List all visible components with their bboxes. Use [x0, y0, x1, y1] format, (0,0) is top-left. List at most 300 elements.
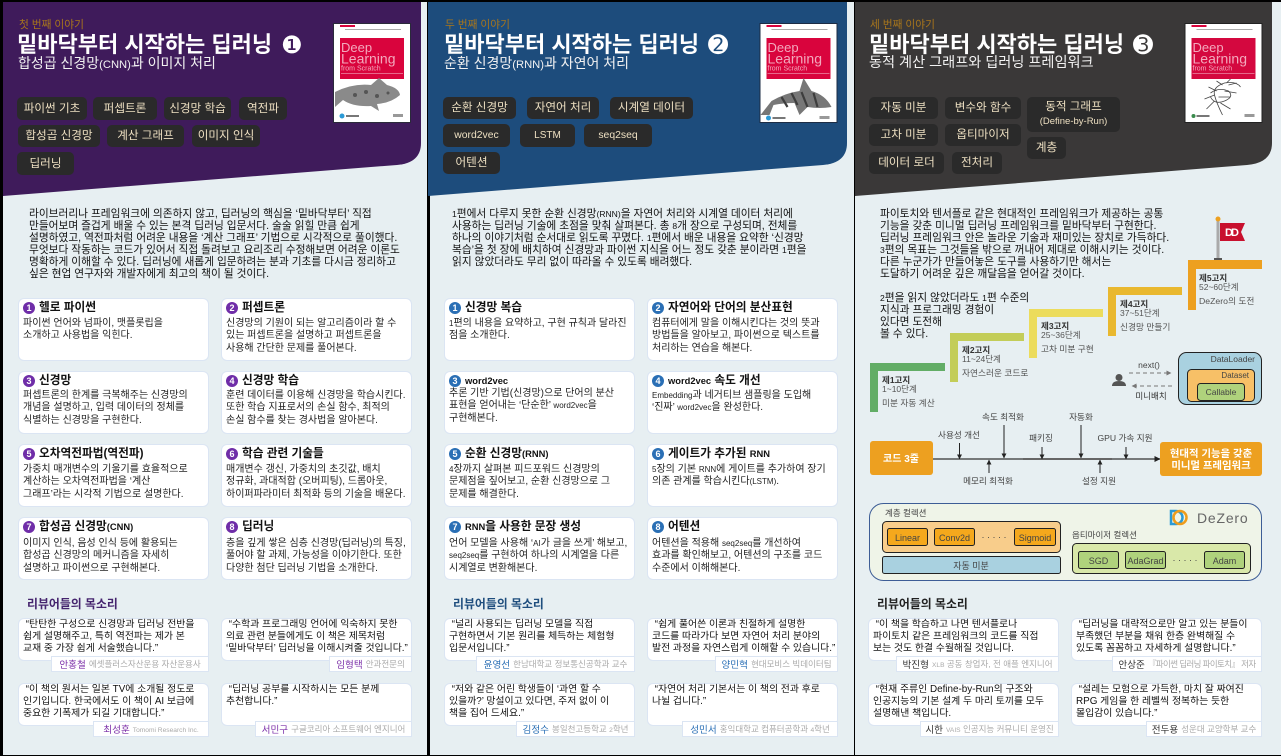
card text: 문제점을 짚어보고, 순환 신경망으로 그: [449, 476, 610, 487]
stair: base camp 5: [1188, 260, 1262, 310]
review text: [449, 684, 609, 721]
optimizer collection: SGD: [1089, 556, 1109, 566]
stair: base camp 1: [870, 363, 945, 412]
card text: 추론 기반 기법(신경망)으로 단어의 분산: [449, 388, 614, 399]
tag: 순환 신경망: [451, 101, 508, 114]
card text: 식별하는 신경망을 구현한다.: [23, 415, 142, 426]
review: [444, 618, 635, 672]
tag: [93, 97, 157, 120]
card text: 언어 모델을 사용해 ‘AI가 글을 쓰게’ 해보고,: [449, 538, 627, 549]
title: 밑바닥부터 시작하는 딥러닝: [869, 32, 1124, 57]
icon: number: 3: [452, 376, 458, 386]
layer collection: Sigmoid: [1019, 533, 1051, 543]
tag: [443, 97, 516, 119]
stair: base camp 2: 11~24단계: [962, 354, 1001, 364]
review text: 교재 중 가장 쉽게 서술했습니다.”: [23, 643, 158, 654]
title: 밑바닥부터 시작하는 딥러닝: [17, 32, 272, 57]
reviewer: [93, 721, 209, 737]
tag: [443, 124, 510, 147]
card text: 합성곱 신경망의 메커니즘을 자세히: [23, 550, 169, 561]
intro text: 만들어보며 즐겁게 배울 수 있는 본격 딥러닝 입문서다. 술술 읽힐 만큼 쉽게: [29, 220, 360, 232]
tag: 어텐션: [456, 156, 488, 169]
volume number: ➌: [1133, 31, 1153, 59]
prerequisite text: 볼 수 있다.: [880, 328, 928, 340]
reviews heading: 리뷰어들의 목소리: [877, 597, 968, 611]
review text: 몰입감이 있습니다.”: [1076, 708, 1157, 719]
icon: number: 6: [229, 449, 234, 459]
tag: 계층: [1036, 141, 1057, 154]
reviewer: [896, 656, 1059, 672]
book cover: Deep: [341, 40, 372, 55]
intro text: 1편에서 다루지 못한 순환 신경망(RNN)을 자연어 처리와 시계열 데이터 처리에: [452, 208, 793, 220]
reviewer: [476, 656, 635, 672]
card text: 처리하는 연습을 해본다.: [652, 343, 752, 354]
tag: 합성곱 신경망: [25, 129, 93, 142]
tag: [869, 97, 938, 119]
card: chapter 7: [18, 517, 209, 580]
card text: [449, 463, 610, 500]
reviewer: 한남대학교 정보통신공학과 교수: [513, 659, 627, 669]
review text: [1076, 619, 1247, 656]
review text: [226, 684, 379, 707]
tag: 자동 미분: [881, 101, 926, 114]
reviewer: 박진형: [902, 660, 929, 671]
tag: [239, 97, 287, 120]
card text: 컴퓨터에게 말을 이해시킨다는 것의 뜻과: [652, 318, 820, 329]
review: [18, 618, 209, 672]
arrow: next(): [1129, 360, 1171, 373]
card text: 계산하는 오차역전파법을 ‘계산: [23, 476, 150, 487]
card text: [226, 463, 406, 500]
review text: 추천합니다.”: [226, 696, 277, 707]
icon: number: 2: [229, 303, 234, 313]
tag: 시계열 데이터: [618, 101, 685, 114]
review text: 코드를 따라가다 보면 자연어 처리 분야의: [652, 631, 820, 642]
icon: user: [1112, 374, 1126, 386]
stair: base camp 3: [1029, 309, 1103, 358]
card text: [449, 387, 614, 424]
review text: 쉽게 설명해주고, 특히 역전파는 제가 본: [23, 631, 185, 642]
review: [647, 618, 838, 672]
tag: [17, 152, 74, 175]
card text: 소개하고 사용법을 익힌다.: [23, 330, 133, 341]
stair: base camp 3: 고차 미분 구현: [1041, 343, 1094, 354]
layer collection: · · · · ·: [982, 532, 1006, 542]
timeline feature labels and arrows: 속도 최적화: [982, 411, 1024, 422]
intro text: 딥러닝 프레임워크 안은 놀라운 기술과 재미있는 장치로 가득하다.: [880, 232, 1169, 244]
optimizer collection: [1072, 530, 1250, 574]
review text: “이 책의 원서는 일본 TV에 소개될 정도로: [26, 684, 194, 695]
icon: number: [23, 302, 35, 314]
timeline feature labels and arrows: 사용성 개선: [938, 430, 980, 440]
reviewer: [255, 721, 412, 737]
layer collection: Conv2d: [939, 533, 970, 543]
reviewer: 윤영선: [484, 660, 510, 671]
tag: [610, 97, 693, 119]
reviewer: 성민서: [690, 725, 717, 736]
review text: “설레는 모험으로 가득한, 마치 잘 짜여진: [1079, 684, 1244, 695]
icon: number: 6: [655, 449, 660, 459]
stair: base camp 2: [950, 333, 1028, 382]
reviewer: [51, 656, 209, 672]
review text: [652, 619, 835, 656]
stair: base camp 4: 제4고지: [1120, 299, 1148, 309]
panel: book 3: [854, 0, 1281, 756]
diagrams: stairs, dataloader, timeline, DeZero: [854, 200, 1281, 590]
review: [221, 683, 412, 737]
stair: base camp 2: 자연스러운 코드로: [962, 368, 1028, 378]
tag: [520, 124, 575, 147]
subtitle: 합성곱 신경망(CNN)과 이미지 처리: [18, 55, 216, 71]
card title: 순환 신경망(RNN): [465, 447, 548, 460]
tag: 딥러닝: [30, 156, 62, 170]
arrow: next(): next(): [1138, 360, 1160, 370]
card text: 1편의 내용을 요약하고, 구현 규칙과 달라진: [449, 318, 627, 329]
tag: 이미지 인식: [198, 129, 254, 142]
card text: 어텐션을 적용해 seq2seq를 개선하여: [652, 538, 801, 549]
icon: summit flag: [1214, 216, 1245, 260]
tag: [869, 152, 944, 174]
card: chapter 5: [444, 444, 635, 507]
reviewer: [329, 656, 412, 672]
timeline start: code 3 lines: 코드 3줄: [883, 453, 919, 465]
intro text: 다른 누군가가 만들어놓은 도구를 사용하기만 해서는: [880, 256, 1111, 268]
card text: [652, 317, 820, 354]
icon: number: 3: [26, 376, 32, 386]
title: 밑바닥부터 시작하는 딥러닝: [444, 32, 699, 57]
review text: “널리 사용되는 딥러닝 모델을 직접: [452, 619, 593, 630]
card text: seq2seq를 구현하여 하나의 시계열을 다른: [449, 550, 619, 561]
card: chapter 6: [221, 444, 412, 507]
intro text: [29, 208, 400, 280]
card text: ‘진짜’ word2vec을 완성한다.: [652, 402, 763, 413]
icon: number: 5: [452, 449, 458, 459]
tag: [952, 152, 1002, 174]
review: [221, 618, 412, 672]
tag: [527, 97, 599, 119]
reviewer: 최성훈: [103, 725, 130, 736]
review text: 인기입니다. 한국에서도 이 책이 AI 보급에: [23, 696, 194, 707]
reviewer: [516, 721, 635, 737]
timeline feature labels and arrows: 설정 지원: [1082, 476, 1116, 486]
intro text: 도달하기 어려운 깊은 깨달음을 얻어갈 것이다.: [880, 268, 1085, 280]
timeline end: minimal framework: 현대적 기능을 갖춘: [1170, 447, 1253, 460]
review: [1071, 618, 1262, 672]
review text: “쉽게 풀어쓴 이론과 친절하게 설명한: [655, 619, 805, 630]
card text: 손실 함수를 찾는 경사법을 알아본다.: [226, 415, 378, 426]
DeZero logo: DeZero: [1197, 510, 1248, 526]
card text: [652, 389, 811, 413]
review text: [873, 684, 1044, 721]
icon: number: 2: [655, 303, 660, 313]
book cover: [760, 23, 838, 123]
card text: Embedding과 네거티브 샘플링을 도입해: [652, 390, 811, 401]
review text: 있을까?’ 망설이고 있다면, 주저 없이 이: [449, 696, 609, 707]
prerequisite text: 지식과 프로그래밍 경험이: [880, 304, 994, 316]
stair: base camp 1: 미분 자동 계산: [882, 397, 935, 408]
tag: [869, 124, 938, 146]
panel background: [855, 2, 1281, 755]
reviewer: [1146, 721, 1262, 737]
tag: seq2seq: [598, 130, 638, 140]
card text: 설명하고 파이썬으로 구현해본다.: [23, 563, 160, 574]
book cover: from Scratch: [341, 66, 381, 72]
card title: 헬로 파이썬: [39, 301, 96, 314]
review text: 책을 집어 드세요.”: [449, 708, 524, 719]
stair: base camp 5: DeZero의 도전: [1199, 296, 1254, 306]
card text: [449, 317, 627, 341]
card text: 가중치 매개변수의 기울기를 효율적으로: [23, 464, 188, 475]
review text: ‘밑바닥부터’ 딥러닝을 이해시켜줄 것입니다.”: [226, 643, 408, 654]
icon: number: 1: [26, 303, 32, 313]
card text: 점을 소개한다.: [449, 330, 510, 341]
intro text: 무엇보다 작동하는 코드가 있어서 직접 돌려보고 요리조리 수정해보면 어려운 이론도: [29, 244, 400, 256]
review text: 파이토치 같은 프레임워크의 코드를 직접: [873, 631, 1038, 642]
reviewer: 안상준: [1118, 660, 1145, 671]
card title: 딥러닝: [242, 520, 274, 533]
stair: base camp 5: 제5고지: [1199, 273, 1227, 283]
book cover: Deep: [768, 40, 799, 55]
icon: number: 4: [655, 376, 660, 386]
card text: 매개변수 갱신, 가중치의 초깃값, 배치: [226, 464, 381, 475]
subtitle: 동적 계산 그래프와 딥러닝 프레임워크: [869, 55, 1094, 71]
card: chapter 2: [647, 298, 838, 361]
intro text: [452, 208, 806, 268]
reviewer: 시한: [925, 725, 943, 736]
card text: 퍼셉트론의 한계를 극복해주는 신경망의: [23, 390, 188, 401]
prerequisite text: 2편을 읽지 않았더라도 1편 수준의: [880, 292, 1029, 304]
reviewer: [682, 721, 838, 737]
intro text: 파이토치와 텐서플로 같은 현대적인 프레임워크가 제공하는 공통: [880, 208, 1163, 220]
card text: [449, 537, 627, 574]
tag: [18, 125, 100, 147]
tag: 자연어 처리: [535, 101, 591, 114]
card text: 이미지 인식, 음성 인식 등에 활용되는: [23, 538, 178, 549]
autograd box: 자동 미분: [953, 561, 989, 571]
stair: base camp 3: 25~36단계: [1041, 330, 1081, 340]
icon: summit flag: DD: [1225, 227, 1239, 239]
tag: [443, 152, 500, 174]
volume number: ➋: [708, 31, 728, 59]
card text: 훈련 데이터를 이용해 신경망을 학습시킨다.: [226, 390, 406, 401]
stair: base camp 1: 제1고지: [882, 375, 910, 385]
reviewer: 에셋플러스자산운용 자산운용사: [89, 659, 201, 669]
icon: number: 7: [452, 522, 458, 532]
icon: number: [449, 521, 461, 533]
card: chapter 3: [444, 371, 635, 434]
intro text: 복습’을 첫 장에 배치하여 신경망과 파이썬 지식을 어느 정도 갖춘 분이라면 1편을: [452, 244, 806, 256]
reviewer: 성운대 교양학부 교수: [1181, 724, 1256, 734]
card text: [23, 317, 163, 341]
card text: 개념을 설명하고, 입력 데이터의 정체를: [23, 402, 184, 413]
stair: base camp 4: 신경망 만들기: [1120, 321, 1170, 332]
card text: [23, 537, 178, 574]
review text: 중요한 기폭제가 되길 기대합니다.”: [23, 708, 164, 719]
reviewer: 현대모비스 빅데이터팀: [751, 659, 832, 669]
card text: 다양한 첨단 딥러닝 기법을 소개한다.: [226, 563, 378, 574]
card title: 자연어와 단어의 분산표현: [668, 301, 793, 314]
tag: 전처리: [961, 156, 993, 169]
tag: [1027, 97, 1120, 132]
review text: “현재 주류인 Define-by-Run의 구조와: [876, 684, 1033, 695]
DeZero architecture panel: [870, 504, 1262, 580]
icon: number: [652, 448, 664, 460]
icon: number: [449, 302, 461, 314]
tag: 퍼셉트론: [104, 102, 146, 114]
review text: 구현하면서 기본 원리를 체득하는 체험형: [449, 631, 614, 642]
DataLoader diagram: Callable: [1206, 387, 1237, 397]
card title: 오차역전파법(역전파): [39, 447, 144, 460]
card text: 표현을 얻어내는 ‘단순한’ word2vec을: [449, 400, 597, 411]
reviewer: [715, 656, 838, 672]
review: [18, 683, 209, 737]
review text: “저와 같은 어린 학생들이 ‘과연 할 수: [452, 684, 601, 695]
card text: 효과를 확인해보고, 어텐션의 구조를 코드: [652, 550, 822, 561]
stair: base camp 3: 제3고지: [1041, 321, 1069, 331]
card text: [226, 317, 396, 354]
reviewer: 김정수: [523, 725, 549, 736]
intro text: 하나의 이야기처럼 순서대로 읽도록 꾸몄다. 1편에서 배운 내용을 요약한 ‘신경망: [452, 232, 804, 244]
icon: number: [652, 302, 664, 314]
layer collection: 계층 컬렉션: [885, 508, 926, 518]
stair: base camp 5: 52~60단계: [1199, 282, 1239, 292]
review text: 부족했던 부분을 채워 한층 완벽해질 수: [1076, 631, 1235, 642]
intro text: [880, 208, 1169, 280]
card title: 신경망: [39, 374, 71, 387]
intro text: 사용하는 딥러닝 기술에 초점을 맞춰 살펴본다. 총 8개 장으로 구성되며, 전체를: [452, 220, 797, 232]
reviewer: Tomomi Research Inc.: [133, 727, 199, 734]
icon: number: 1: [452, 303, 458, 313]
tag: 동적 그래프: [1045, 100, 1102, 113]
card text: [652, 463, 826, 487]
arrow: mini batch: 미니배치: [1135, 391, 1167, 401]
card title: 퍼셉트론: [242, 301, 285, 314]
intro text: 라이브러리나 프레임워크에 의존하지 않고, 딥러닝의 핵심을 ‘밑바닥부터’ 직접: [29, 208, 372, 220]
review text: 설명해낸 책입니다.: [873, 708, 951, 719]
timeline end: minimal framework: [1160, 442, 1262, 476]
stair: base camp 4: 37~51단계: [1120, 308, 1160, 318]
card text: 정규화, 과대적합 (오버피팅), 드롭아웃,: [226, 476, 387, 487]
optimizer collection: · · · · ·: [1172, 555, 1198, 565]
card text: 의존 관계를 학습시킨다(LSTM).: [652, 476, 779, 487]
card text: 또한 학습 지표로서의 손실 함수, 최적의: [226, 402, 390, 413]
timeline feature labels and arrows: 패키징: [1029, 433, 1053, 443]
icon: number: 7: [26, 522, 32, 532]
review text: 보는 것도 한결 수월해질 것입니다.: [873, 643, 1014, 654]
review text: 있도록 꼼꼼하고 자세하게 설명합니다.”: [1076, 643, 1236, 654]
review text: 발전 과정을 자연스럽게 이해할 수 있습니다.”: [652, 643, 835, 654]
DataLoader diagram: Dataset: [1221, 371, 1250, 380]
optimizer collection: Adam: [1213, 556, 1236, 566]
tag: [164, 97, 231, 120]
card title: 합성곱 신경망(CNN): [39, 520, 133, 533]
optimizer collection: 옵티마이저 컬렉션: [1072, 530, 1137, 540]
stair: base camp 1: 1~10단계: [882, 384, 917, 394]
intro text: 싶은 현업 연구자와 개발자에게 최고의 책이 될 것이다.: [29, 268, 269, 280]
DataLoader diagram: DataLoader: [1211, 354, 1255, 364]
reviewer: 봉일천고등학교 2학년: [552, 724, 628, 734]
intro text: 명확하게 이해할 수 있다. 딥러닝에 새롭게 입문하려는 분과 기초를 다시금 정리하고: [29, 256, 396, 268]
book cover: Deep: [1192, 40, 1224, 55]
card text: 파이썬 언어와 넘파이, 맷플롯립을: [23, 318, 163, 329]
card title: word2vec 속도 개선: [668, 374, 761, 387]
card text: 시계열로 변환해본다.: [449, 563, 537, 574]
review text: 의료 관련 분들에게도 이 책은 제목처럼: [226, 631, 385, 642]
timeline feature labels and arrows: [938, 411, 1153, 486]
review text: 인공지능의 기본 설계 두 마리 토끼를 모두: [873, 696, 1044, 707]
reviewer: 구글코리아 소프트웨어 엔지니어: [291, 724, 405, 734]
card text: [23, 463, 188, 500]
layer collection: [882, 508, 1060, 552]
card text: 있는 퍼셉트론을 설명하고 퍼셉트론을: [226, 330, 382, 341]
card title: 어텐션: [668, 520, 700, 533]
icon: number: [652, 521, 664, 533]
card text: 4장까지 살펴본 피드포워드 신경망의: [449, 464, 600, 475]
tag: 고차 미분: [881, 128, 926, 141]
volume number: ❶: [281, 31, 303, 59]
timeline start: code 3 lines: [870, 441, 933, 475]
tag: [192, 125, 260, 147]
stair: base camp 4: [1108, 287, 1182, 336]
reviewer: 안과전문의: [366, 659, 405, 669]
reviewer: 임형택: [336, 660, 363, 671]
review text: [23, 618, 194, 654]
card: chapter 5: [18, 444, 209, 507]
review text: 입문서입니다.”: [449, 643, 510, 654]
optimizer collection: AdaGrad: [1127, 556, 1164, 566]
review text: “탄탄한 구성으로 신경망과 딥러닝 전반을: [26, 619, 194, 630]
card text: 그래프’라는 시각적 기법으로 설명한다.: [23, 489, 184, 500]
tag: [1027, 137, 1066, 159]
review text: [873, 619, 1038, 656]
review text: “자연어 처리 기본서는 이 책의 전과 후로: [655, 684, 820, 695]
icon: number: [23, 521, 35, 533]
autograd box: [882, 556, 1060, 574]
timeline feature labels and arrows: 자동화: [1069, 412, 1093, 422]
review text: “딥러닝을 대략적으로만 알고 있는 분들이: [1079, 619, 1247, 630]
review text: “수학과 프로그래밍 언어에 익숙하지 못한: [229, 619, 397, 630]
card text: 층을 깊게 쌓은 심층 신경망(딥러닝)의 특징,: [226, 538, 406, 549]
icon: number: 8: [655, 522, 660, 532]
review text: [1076, 684, 1244, 721]
timeline feature labels and arrows: GPU 가속 지원: [1097, 433, 1153, 443]
reviewer: XLB 공동 창업자, 전 애플 엔지니어: [932, 659, 1053, 669]
icon: number: [449, 448, 461, 460]
subtitle: 순환 신경망(RNN)과 자연어 처리: [444, 55, 629, 71]
icon: number: [226, 521, 238, 533]
card: chapter 8: [647, 517, 838, 580]
tag: 파이썬 기초: [24, 102, 80, 114]
kicker: 첫 번째 이야기: [19, 19, 84, 31]
arrow: mini batch: [1132, 386, 1172, 401]
card: chapter 7: [444, 517, 635, 580]
panel background: [3, 2, 427, 755]
header banner: [428, 2, 847, 196]
tag: [107, 125, 184, 147]
reviewer: 서민구: [262, 725, 288, 736]
reviewer: VAIS 인공지능 커뮤니티 운영진: [946, 724, 1054, 734]
tag: 역전파: [247, 102, 279, 114]
review text: [449, 619, 614, 656]
card: chapter 1: [18, 298, 209, 361]
review: [444, 683, 635, 737]
reviewer: 홍익대학교 컴퓨터공학과 4학년: [720, 724, 830, 734]
card title: word2vec: [465, 376, 508, 386]
card text: [652, 537, 822, 574]
tag: [945, 97, 1021, 119]
reviewer: 『파이썬 딥러닝 파이토치』 저자: [1148, 659, 1256, 669]
intro text: 설명하였고, 역전파처럼 어려운 내용을 ‘계산 그래프’ 기법으로 시각적으로 풀이했다.: [29, 232, 397, 244]
